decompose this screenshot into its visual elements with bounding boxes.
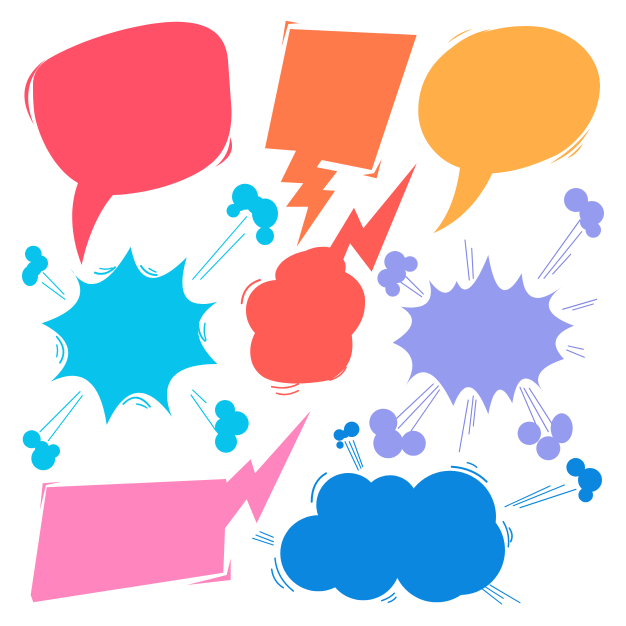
panel: orange lightning speech box xyxy=(265,21,417,247)
cyan puff top right xyxy=(227,184,278,245)
cyan puff bottom right xyxy=(215,400,249,453)
purple puff top left xyxy=(377,251,418,297)
cyan burst shape xyxy=(42,247,217,425)
blue puff top left xyxy=(334,422,359,449)
panel: blue cloud with puffs xyxy=(253,422,602,604)
panel: cyan starburst with puffs xyxy=(22,184,278,470)
purple burst shape xyxy=(393,255,574,414)
coral cloud shape xyxy=(246,163,417,384)
cyan burst accent arcs xyxy=(57,266,206,408)
panel: purple starburst with puffs xyxy=(369,188,604,460)
coral accent arcs xyxy=(242,280,346,395)
blue speed lines xyxy=(253,441,576,604)
purple speed lines xyxy=(397,220,597,452)
purple puff bottom left xyxy=(369,409,426,458)
blue accent arcs xyxy=(272,463,512,602)
purple puff top right xyxy=(564,188,604,238)
cyan puff top left xyxy=(22,246,48,286)
panel: yellow oval speech bubble xyxy=(418,26,600,233)
panel: pink lightning speech box xyxy=(31,411,311,602)
cyan speed lines xyxy=(40,217,247,441)
purple puff bottom right xyxy=(518,413,573,460)
panel: red rounded speech bubble xyxy=(24,22,232,265)
panel: coral cloud with lightning tail xyxy=(242,163,417,395)
blue cloud shape xyxy=(280,471,505,602)
blue puff right xyxy=(566,458,602,502)
cyan puff bottom left xyxy=(23,430,60,470)
